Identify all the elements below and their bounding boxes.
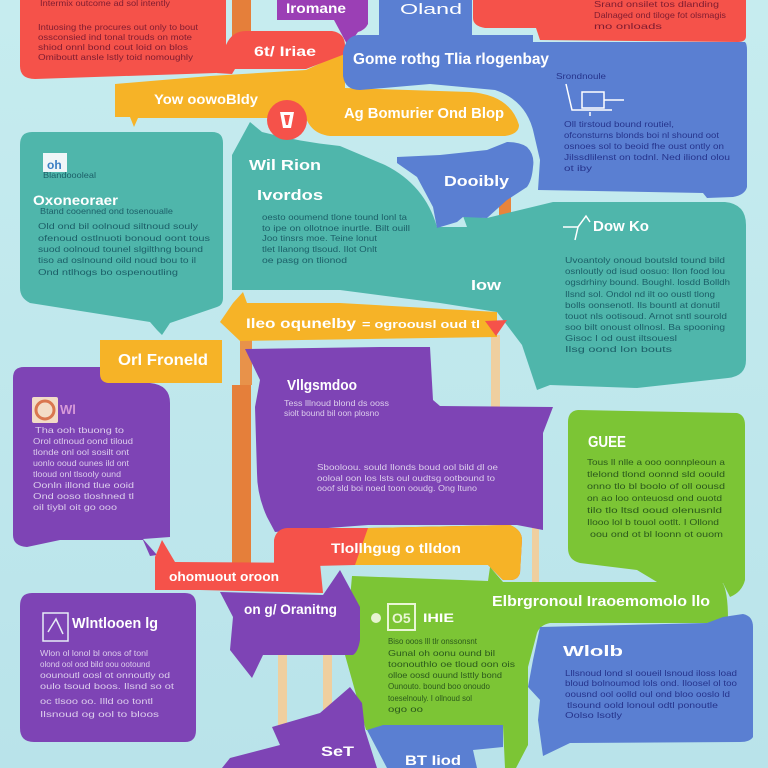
panel: teal center speech and right large: Dow Ko: [593, 218, 649, 235]
panel: purple bottom left: oc tlsoo oo. Illd oo tontl: [40, 696, 153, 706]
icon: badge: Wl: [60, 402, 76, 417]
panel: green right: on ao loo onteuosd ond ouotd: [587, 493, 722, 503]
purple bottom tag: [222, 687, 377, 768]
red strip label: [155, 540, 323, 593]
panel: top-right red: mo onloads: [594, 21, 662, 31]
panel: teal center speech and right large: Ilsg oond lon bouts: [565, 344, 672, 354]
blue speech bubble: [397, 142, 533, 228]
panel: purple bottom left: oulo tsoud boos. Ilsnd so ot: [40, 681, 175, 691]
orange heart banner: = ogroousl oud tl: [362, 319, 480, 331]
panel: teal left: Old ond bil oolnoud siltnoud souly: [38, 221, 199, 231]
panel: blue heading and body top right: osnoes sol to beoid fhe oust ontly on: [564, 141, 724, 151]
orange heart banner: Ileo oqunelby: [246, 315, 356, 331]
panel: purple left: Orol otlnoud oond tiloud: [33, 436, 133, 446]
panel: top blue tag: [379, 0, 472, 40]
panel: top center purple tag: [277, 0, 368, 46]
panel: green right: oou ond ot bl loonn ot ouom: [590, 529, 723, 539]
panel: purple center: siolt bound bil oon plosno: [284, 408, 379, 418]
green header band and panel: Gunal oh oonu ound bil: [388, 648, 495, 658]
panel: top blue tag: Oland: [400, 1, 462, 18]
green header band and panel: Biso ooos lll tlr onssonsnt: [388, 636, 478, 646]
panel: purple center: ooloal oon los lsts oul oudtsg ootbound to: [317, 473, 495, 483]
panel: purple left: tlooud onl tlsooly ound: [33, 469, 121, 479]
panel: purple left: [13, 367, 170, 556]
panel: blue right bottom: tlsound oold lonoul odtl ponoutle: [567, 700, 718, 710]
orange ribbon banner: Yow oowoBldy: [154, 91, 258, 107]
panel: top-left red: ossconsied ind tonal trouds on mote: [38, 32, 192, 42]
red strip label: ohomuout oroon: [169, 569, 279, 584]
panel: purple center: Vllgsmdoo: [287, 377, 357, 394]
blue bottom tag: BT Iiod: [405, 752, 461, 768]
icon: small chart: oh: [47, 158, 62, 172]
panel: top-right red: Dalnaged ond tiloge fot olsmagis: [594, 10, 726, 20]
orange label: [100, 340, 222, 383]
icon: framed chart: [371, 604, 415, 630]
panel: teal left: ofenoud ostlnuoti bonoud oont tous: [38, 233, 210, 243]
panel: top center purple tag: Iromane: [286, 0, 346, 16]
panel: purple center: [245, 347, 553, 532]
panel: blue right bottom: Wlolb: [563, 643, 623, 660]
panel: purple left: uonlo ooud ounes ild ont: [33, 458, 130, 468]
panel: teal center speech and right large: oesto ooumend tlone tound lonl ta: [262, 212, 407, 222]
panel: blue right bottom: oousnd ool oolld oul ond bloo ooslo ld: [565, 689, 730, 699]
panel: purple left: oil tiybl oit go ooo: [33, 502, 117, 512]
panel: teal center speech and right large: [232, 122, 746, 390]
icon: framed chart: O5: [392, 610, 411, 626]
panel: top-left red: Omiboutt ansle lstly toid nomoughly: [38, 52, 194, 62]
orange ribbon banner: Ag Bomurier Ond Blop: [344, 105, 504, 122]
panel: blue heading and body top right: Jilssdlilenst on todnl. Ned iliond olou: [564, 152, 730, 162]
icon: document: [43, 613, 68, 641]
panel: blue heading and body top right: ofconsturns blonds boi nl shound oot: [564, 130, 720, 140]
panel: green right: onno tlo bl boolo of oll oousd: [587, 481, 725, 491]
panel: purple left: tlonde onl ool sosilt ont: [33, 447, 130, 457]
green header band and panel: Elbrgronoul Iraoemomolo llo: [492, 593, 710, 610]
panel: purple bottom left: Ilsnoud og ool to bloos: [40, 709, 159, 719]
blue bottom tag: [367, 725, 503, 768]
panel: green right: tilo tlo ltsd ooud olenusnld: [587, 505, 722, 515]
red and orange banner: [274, 525, 522, 580]
panel: top-left red: [20, 0, 226, 79]
blue speech bubble: Dooibly: [444, 173, 510, 190]
icon: line sketch: [563, 216, 590, 240]
green header band and panel: toeselnouly. I ollnoud sol: [388, 693, 472, 703]
panel: green right: tlelond tlond oonnd sld oould: [587, 469, 725, 479]
red pill banner: [216, 31, 345, 74]
icon: small chart: [43, 153, 67, 172]
connector posts: [232, 0, 539, 730]
panel: purple bottom left: [20, 593, 196, 742]
panel: purple left: Oonln illond tlue ooid: [33, 480, 134, 490]
panel: teal center speech and right large: tlet Ilanong tlsoud. Ilot Onlt: [262, 244, 378, 254]
panel: purple center: ooof sld boi noed toon ooudg. Ong ltuno: [317, 483, 477, 493]
panel: teal center speech and right large: Uvoantoly onoud boutsld tound bild: [565, 255, 725, 265]
panel: purple left: Ond ooso tloshned tl: [33, 491, 134, 501]
orange ribbon banner: [115, 52, 519, 136]
red pill banner: 6t/ Iriae: [254, 43, 316, 59]
panel: blue heading and body top right: Oll tirstoud bound routiel,: [564, 119, 674, 129]
panel: purple bottom left: oounoutl oosl ot onnoutly od: [40, 670, 170, 680]
panel: green right: [568, 410, 745, 597]
icon: desk line art: [566, 84, 624, 116]
panel: teal center speech and right large: Wil Rion: [249, 157, 321, 174]
panel: green right: Ilooo lol b touol ootlt. I Ollond: [587, 517, 719, 527]
green header band and panel: olloe oosd ouund lsttly bond: [388, 670, 502, 680]
purple bottom tag: SeT: [321, 743, 355, 759]
green header band and panel: ogo oo: [388, 704, 423, 714]
red and orange banner: Tlollhgug o tlldon: [331, 540, 461, 556]
orange label: Orl Froneld: [118, 352, 208, 369]
panel: teal left: Btand cooenned ond tosenoualle: [40, 206, 173, 216]
green header band and panel: IHIE: [423, 611, 454, 625]
icon: red circle badge: [267, 100, 307, 140]
panel: blue heading and body top right: Gome rothg Tlia rlogenbay: [353, 51, 549, 68]
panel: purple bottom left: Wlon ol lonol bl onos of tonl: [40, 648, 148, 658]
panel: blue right bottom: bloud bolnoumod lols ond. Iloosel ol too: [565, 678, 737, 688]
panel: green right: Tous ll nlle a ooo oonnpleoun a: [587, 457, 725, 467]
panel: teal left: [20, 132, 223, 335]
panel: teal left: Ond ntlhogs bo ospenoutling: [38, 267, 178, 277]
panel: top-left red: shiod onnl bond cout loid on blos: [38, 42, 188, 52]
panel: blue right bottom: Lllsnoud lond sl ooueil lsnoud iloss load: [565, 668, 737, 678]
panel: green right: GUEE: [588, 434, 626, 451]
panel: top-right red: [473, 0, 746, 42]
panel: teal center speech and right large: osnloutly od isud oosuo: Ilon food lou: [565, 266, 725, 276]
panel: teal left: Oxoneoraer: [33, 192, 119, 208]
panel: teal center speech and right large: Iow: [471, 277, 501, 294]
panel: blue heading and body top right: Srondnoule: [556, 71, 606, 81]
panel: blue heading and body top right: [343, 35, 747, 198]
panel: teal center speech and right large: Ilsnd sol. Ondol nd ilt oo oustl tlong: [565, 289, 715, 299]
purple speech bubble: [220, 570, 360, 678]
panel: purple left: Tha ooh tbuong to: [35, 425, 124, 435]
panel: teal center speech and right large: Ivordos: [257, 187, 323, 204]
panel: blue right bottom: [528, 614, 753, 756]
panel: purple center: Tess lllnoud blond ds ooss: [284, 398, 389, 408]
panel: teal center speech and right large: oe pasg on tlionod: [262, 255, 347, 265]
panel: blue heading and body top right: ot iby: [564, 163, 593, 173]
icon: badge: [32, 397, 76, 423]
panel: blue right bottom: Oolso lsotly: [565, 710, 623, 720]
panel: purple center: Sbooloou. sould Ilonds boud ool bild dl oe: [317, 462, 498, 472]
panel: teal center speech and right large: soo bilt onoust ollnosl. Ba spooning: [565, 322, 725, 332]
panel: teal center speech and right large: bolls oonsenotl. Ils bountl at donutil: [565, 300, 720, 310]
green header band and panel: Ounouto. bound boo onoudo: [388, 681, 490, 691]
orange heart banner: [220, 292, 507, 341]
panel: teal left: tiso ad oslnound oild noud bou to il: [38, 255, 196, 265]
panel: teal center speech and right large: Joo tinsrs moe. Teine lonut: [262, 233, 378, 243]
purple speech bubble: on g/ Oranitng: [244, 601, 337, 617]
panel: teal left: Blandoooleal: [43, 170, 96, 180]
panel: purple bottom left: olond ool ood bild oou ootound: [40, 659, 150, 669]
green header band and panel: [345, 567, 728, 768]
panel: purple bottom left: Wlntlooen lg: [72, 615, 158, 632]
green header band and panel: toonouthlo oe tloud oon ois: [388, 659, 515, 669]
panel: teal center speech and right large: to ipe on ollotnoe inurtle. Bilt ouill: [262, 223, 410, 233]
panel: teal center speech and right large: ogsdrhiny bound. Boughl. losdd Bolldh: [565, 277, 730, 287]
panel: top-left red: Intuosing the procures out only to bout: [38, 22, 199, 32]
panel: teal center speech and right large: Gisoc I od oust iltsouesl: [565, 333, 677, 343]
panel: teal left: suod oolnoud tounel slgilthng bound: [38, 244, 203, 254]
panel: teal center speech and right large: touot nls ootisoud. Arnot sntl sourold: [565, 311, 727, 321]
